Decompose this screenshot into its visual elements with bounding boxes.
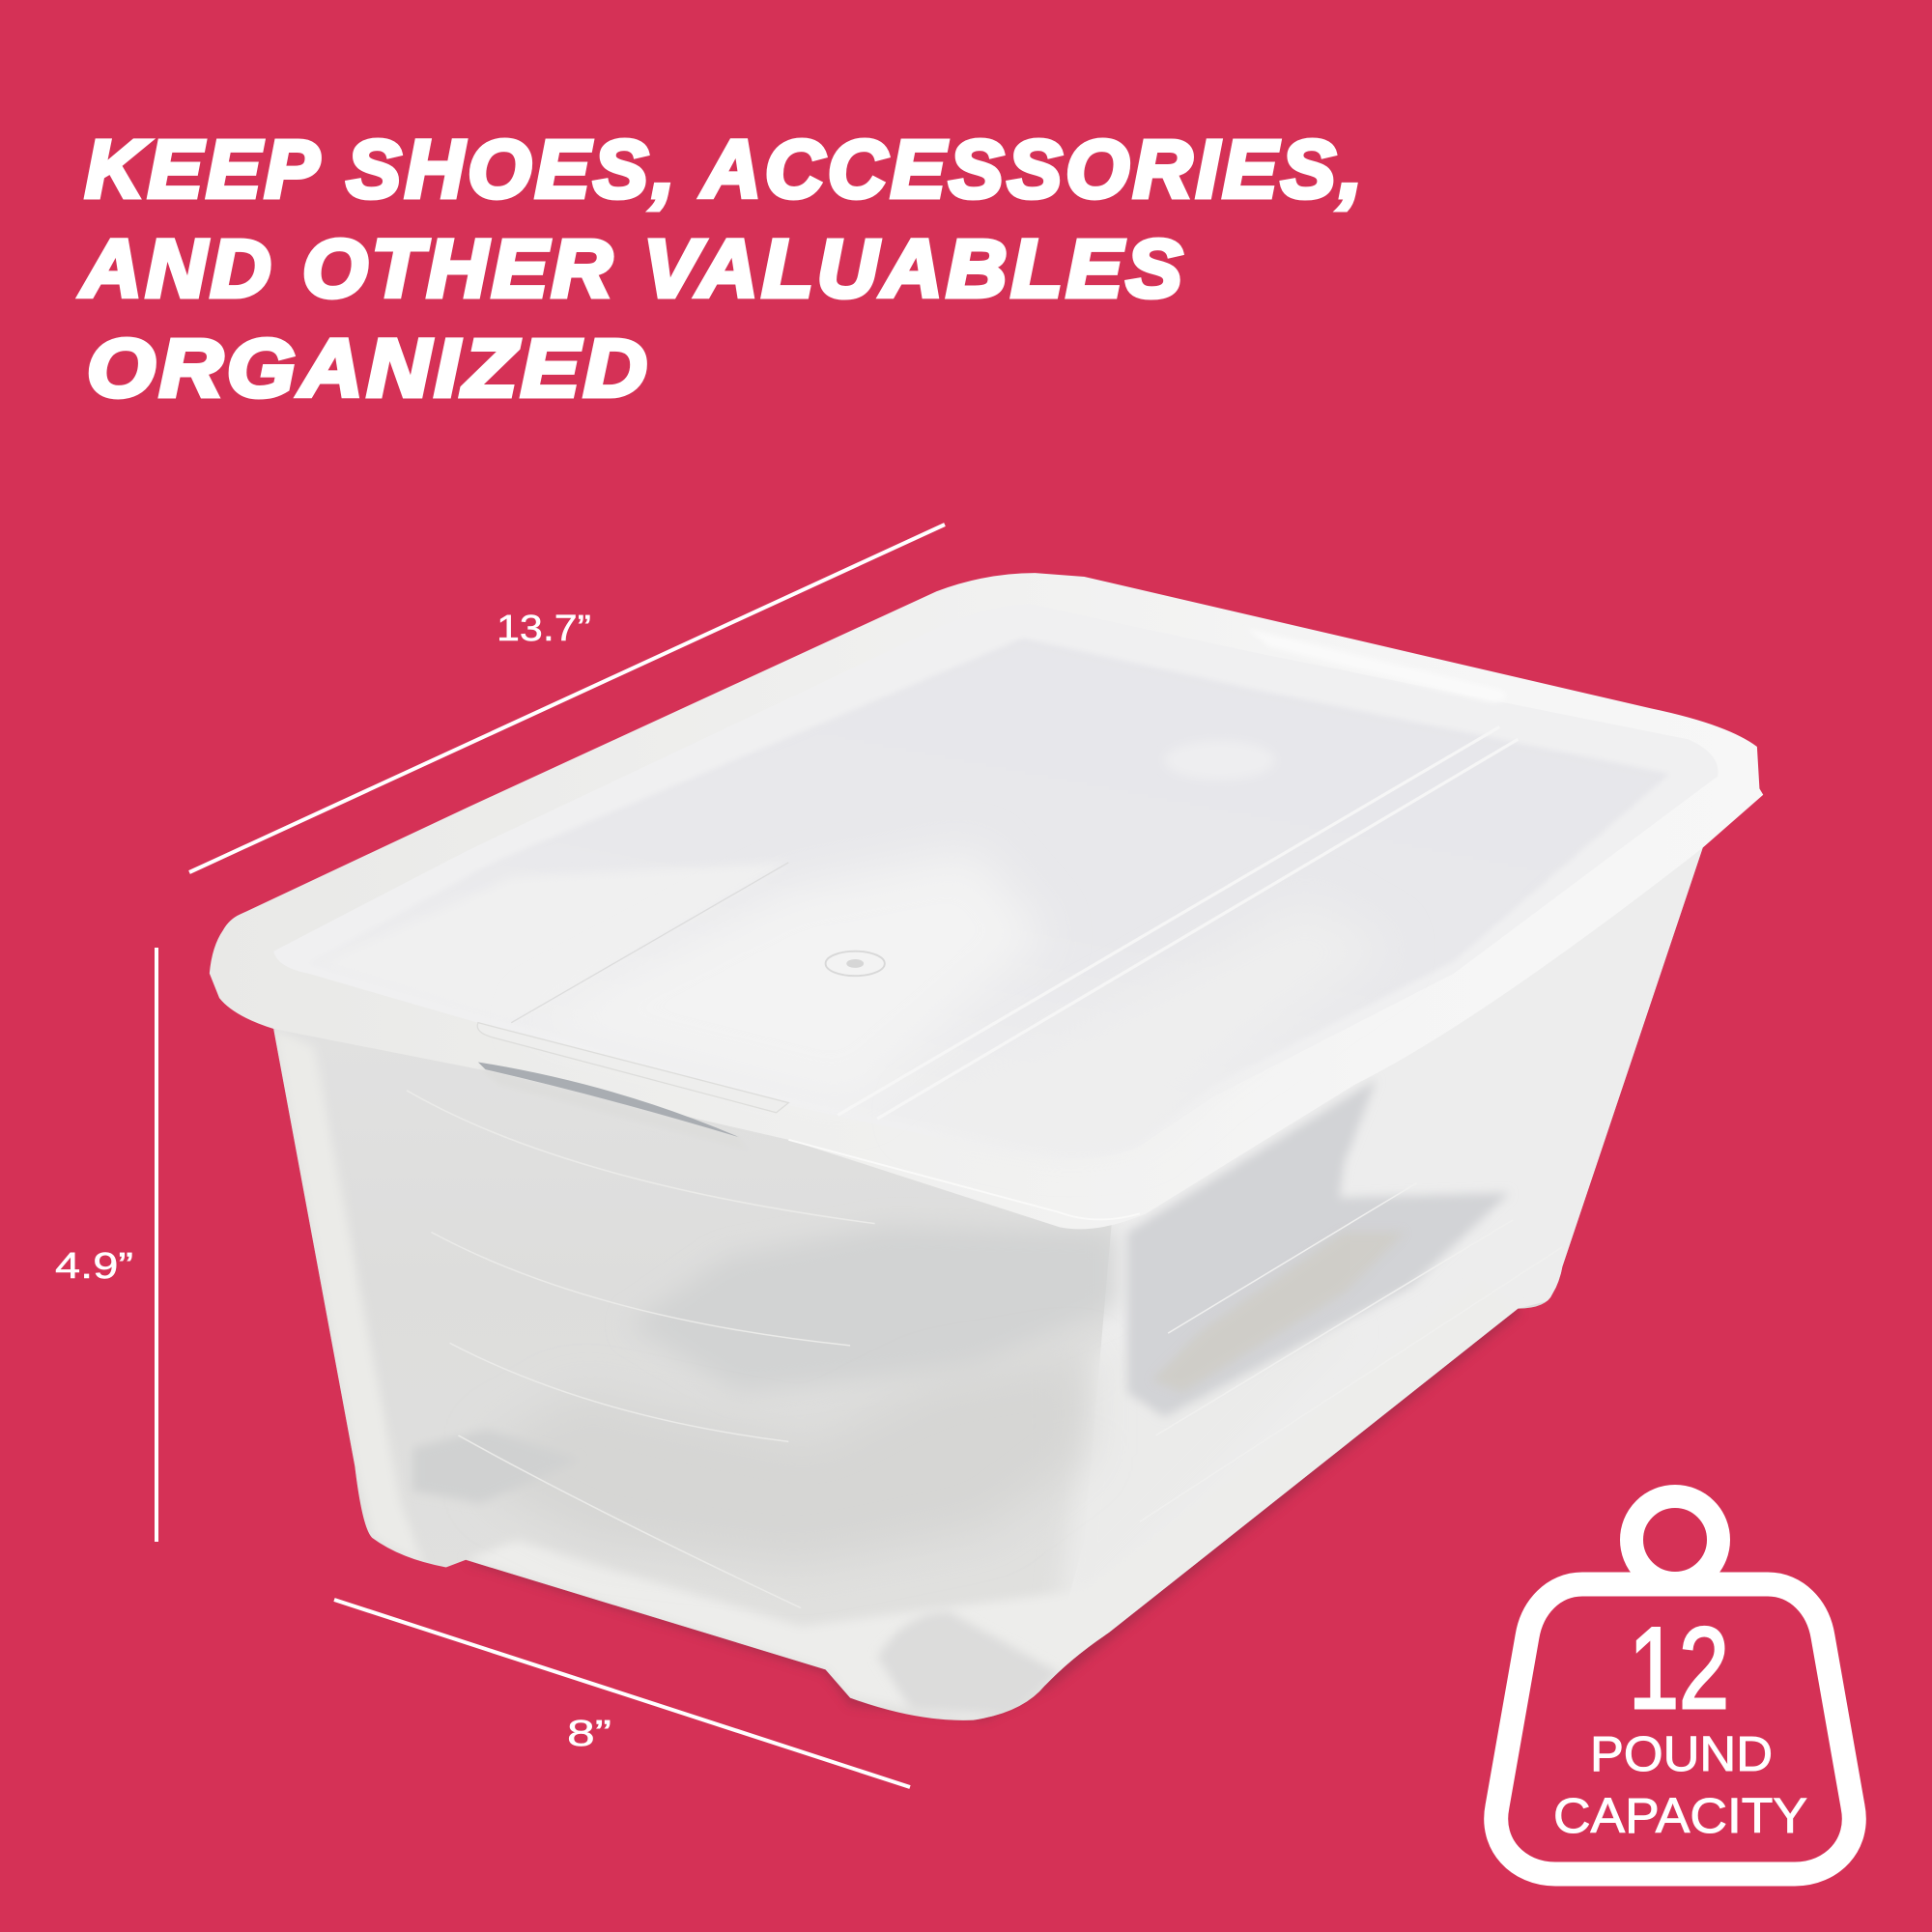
weight ring: [1632, 1496, 1719, 1583]
contents warm tint: [1152, 1233, 1405, 1392]
right face dark window: [1127, 1079, 1509, 1417]
front/side corner lighter strip: [1068, 1364, 1099, 1584]
capacity label: CAPACITY: [1553, 1788, 1807, 1843]
front ribs: [407, 1091, 875, 1608]
front handle slot: [478, 1062, 739, 1137]
back lid handle: [1247, 629, 1506, 702]
box lid rim: [210, 573, 1763, 1229]
lid bright highlight: [529, 850, 1047, 1103]
capacity label: POUND: [1590, 1726, 1773, 1781]
bottom edge highlight: [466, 1282, 1518, 1720]
title: ORGANIZED: [87, 323, 651, 413]
dimension: height line: [155, 948, 158, 1542]
lid mid tone band: [273, 604, 1718, 1160]
title: KEEP SHOES, ACCESSORIES,: [85, 124, 1366, 214]
lid bright lower panel: [323, 863, 788, 1023]
title: AND OTHER VALUABLES: [79, 223, 1186, 314]
left edge highlight: [273, 1029, 425, 1567]
contents shade lower left: [413, 1432, 518, 1501]
dimension: width line: [334, 1600, 910, 1787]
right side face: [1045, 848, 1703, 1686]
capacity number: 12: [1629, 1604, 1729, 1733]
weight body: [1496, 1584, 1854, 1874]
capacity label: [1553, 1726, 1807, 1843]
lid nubs: [826, 952, 885, 976]
contents shadow: dark diagonal band: [649, 1233, 1121, 1385]
dimension: length line: [189, 525, 945, 872]
box ground shadow: [466, 1293, 1520, 1720]
box body: [273, 848, 1703, 1720]
lid lower right panel: [912, 899, 1392, 1146]
lid centre groove: [838, 727, 1518, 1119]
lid inner panel: [308, 639, 1669, 1157]
lid panel edge line: [511, 863, 788, 1023]
side ribs: [1140, 1182, 1562, 1521]
storage box photo illustration: [210, 573, 1763, 1720]
rim lip line: [788, 1140, 1140, 1219]
dimension: length label: 13.7”: [497, 609, 591, 649]
title: [79, 124, 1366, 413]
dimension: width label: 8”: [567, 1714, 611, 1754]
contents shadow: lower band: [535, 1391, 1089, 1544]
icon: weight capacity: [1496, 1496, 1854, 1874]
front handle slot shade: [478, 1067, 750, 1151]
dimension: height label: 4.9”: [55, 1246, 133, 1287]
corner foot shade: [877, 1611, 1060, 1716]
front handle top: [477, 1023, 788, 1113]
